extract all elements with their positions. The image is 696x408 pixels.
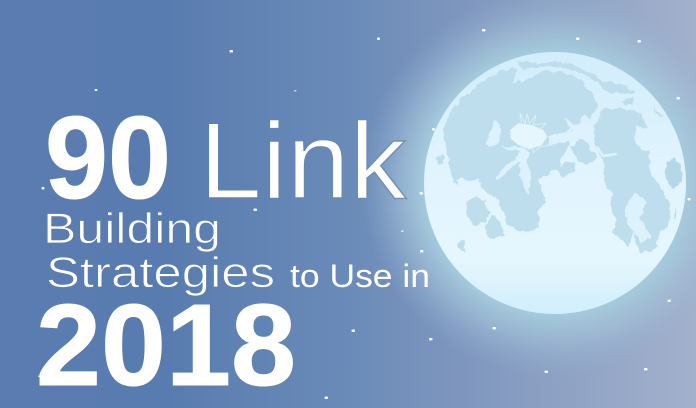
title: Link: Link [199,100,407,222]
title [36,92,430,408]
year: 2018: 2018 [36,280,296,408]
moon surface markings [437,61,682,254]
title: 90: 90 [45,92,171,223]
moon [424,52,686,314]
moon disc [424,52,686,314]
subtitle: to Use in: to Use in [290,258,430,294]
bright highlands [486,119,650,243]
subtitle: Strategies: Strategies [46,249,275,297]
subtitle: Building: Building [43,205,221,253]
bright crater with rays [510,113,552,153]
dark maria [437,61,682,254]
moon glow [360,0,696,378]
